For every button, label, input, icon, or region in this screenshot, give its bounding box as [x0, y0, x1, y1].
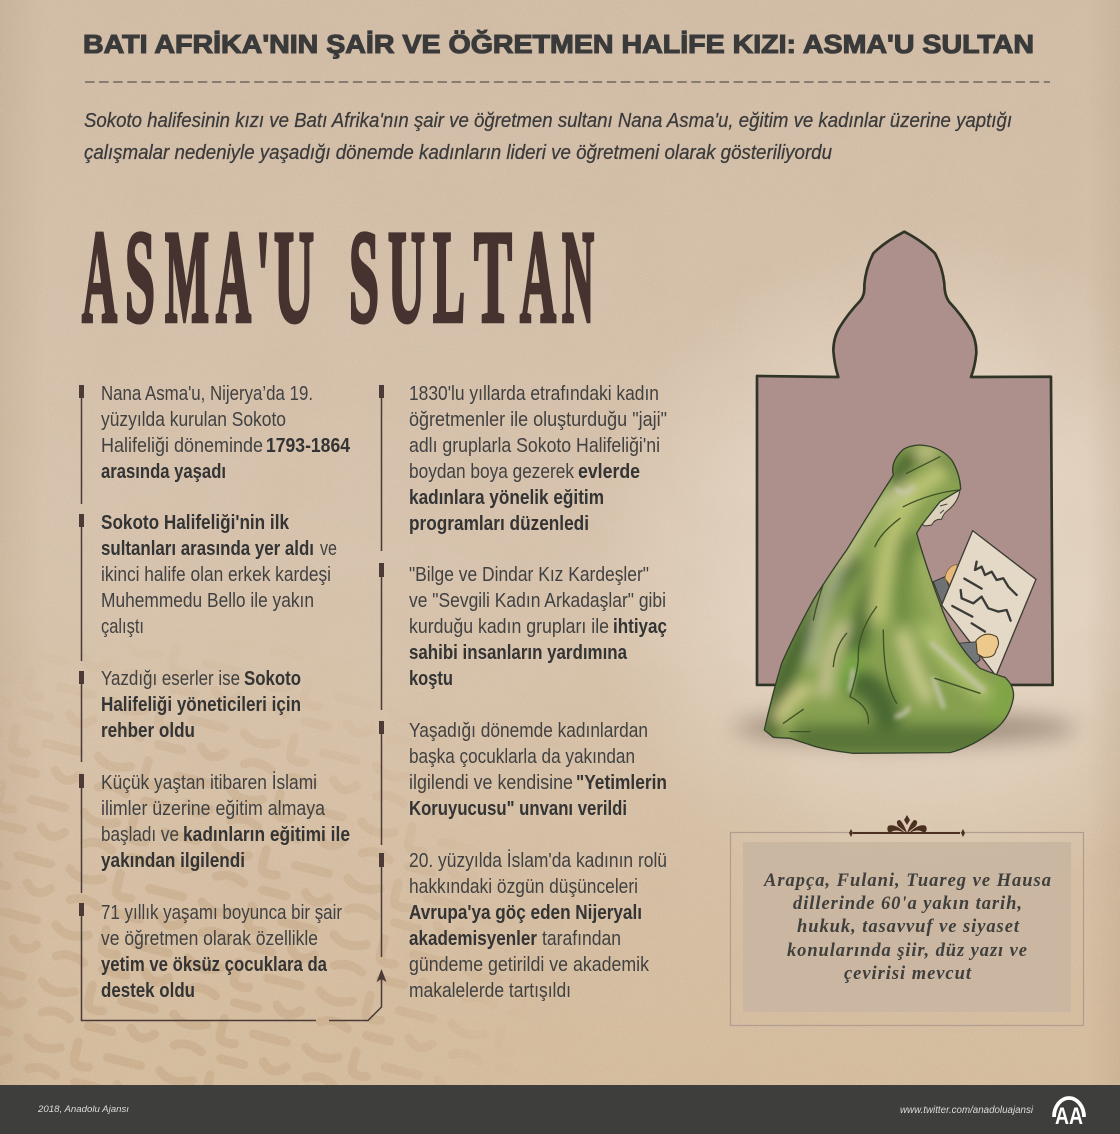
footer bar [0, 1085, 1120, 1134]
text block: women's groups: kurduğu kadın grupları ile [409, 615, 609, 638]
large heading: ASMA'U SULTAN: A [520, 203, 556, 350]
text block: years: Nana Asma'u, Nijerya’da 19. [101, 382, 313, 405]
text block: orphans [101, 901, 342, 1002]
title: BATI AFRİKA'NIN ŞAİR VE ÖĞRETMEN HALİFE KIZI: ASMA'U SULTAN [83, 29, 1034, 59]
quote panel [730, 815, 1084, 1026]
text block: jaji groups: öğretmenler ile oluşturduğu "jaji" [409, 408, 667, 431]
text block: jaji groups: 1830'lu yıllarda etrafındaki kadın [409, 382, 659, 405]
woman figure [757, 440, 1036, 760]
intro text [84, 109, 1012, 164]
text block: years [101, 382, 351, 483]
text block: protector of orphans: Koruyucusu" unvanı verildi [409, 797, 627, 820]
large heading: ASMA'U SULTAN [82, 203, 594, 350]
text block: women's groups: ve "Sevgili Kadın Arkadaşlar" gibi [409, 589, 666, 612]
lower hand and sleeve [958, 634, 998, 665]
large heading: ASMA'U SULTAN: U [274, 203, 314, 350]
text block: orphans: ve öğretmen olarak özellikle [101, 927, 318, 950]
text block: works: Sokoto [244, 667, 301, 690]
text block: women's groups: sahibi insanların yardımına [409, 641, 627, 664]
text block: education: başladı ve [101, 823, 179, 846]
face under hood [920, 490, 960, 526]
large heading: ASMA'U SULTAN: A [216, 203, 251, 350]
text block: jaji groups: adlı gruplarla Sokoto Halifeliği'ni [409, 434, 660, 457]
text block: works [101, 667, 301, 742]
text block: 20th century: 20. yüzyılda İslam'da kadının rolü [409, 849, 667, 872]
text block: education: ilimler üzerine eğitim almaya [101, 797, 326, 820]
text block: first sultans: Sokoto Halifeliği'nin ilk [101, 511, 289, 534]
text block: protector of orphans: başka çocuklarla da yakından [409, 745, 635, 768]
text: N [562, 203, 594, 350]
left text column [101, 382, 351, 1002]
text block: years: yüzyılda kurulan Sokoto [101, 408, 286, 431]
text block: women's groups [409, 563, 667, 690]
credit: 2018, Anadolu Ajansı [37, 1104, 129, 1115]
large heading: ASMA'U SULTAN: M [165, 203, 209, 350]
right text column [409, 382, 667, 1002]
text block: works: rehber oldu [101, 719, 195, 742]
text block: orphans: destek oldu [101, 979, 195, 1002]
text block: education: Küçük yaştan itibaren İslami [101, 771, 317, 794]
quote text: konularında şiir, düz yazı ve [787, 941, 1027, 961]
text block: 20th century: makalelerde tartışıldı [409, 979, 571, 1002]
text block: orphans: yetim ve öksüz çocuklara da [101, 953, 327, 976]
large heading: ASMA'U SULTAN: S [125, 203, 155, 350]
mihrab niche [757, 232, 1053, 685]
text block: first sultans [101, 511, 337, 638]
text block: protector of orphans: ilgilendi ve kendisine [409, 771, 573, 794]
intro text: Sokoto halifesinin kızı ve Batı Afrika'nın şair ve öğretmen sultanı Nana Asma'u, eğitim ve kadınlar üzerine yaptığı [84, 109, 1012, 132]
quote text: çevirisi mevcut [844, 964, 972, 984]
illustration: mihrab frame and seated woman [733, 232, 1077, 760]
quote text: Arapça, Fulani, Tuareg ve Hausa [763, 871, 1051, 891]
text block: jaji groups: programları düzenledi [409, 512, 589, 535]
dashed divider [85, 81, 1050, 83]
text block: 20th century: hakkındaki özgün düşünceleri [409, 875, 638, 898]
text block: education: yakından ilgilendi [101, 849, 245, 872]
text block: years: arasında yaşadı [101, 460, 226, 483]
text block: education: kadınların eğitimi ile [183, 823, 350, 846]
text block: years: 1793-1864 [266, 434, 351, 457]
text block: 20th century: tarafından [542, 927, 621, 950]
text block: first sultans: Muhemmedu Bello ile yakın [101, 589, 314, 612]
social link: www.twitter.com/anadoluajansi [900, 1105, 1034, 1116]
large heading: ASMA'U SULTAN: S [349, 203, 379, 350]
ornament [849, 815, 965, 837]
text block: first sultans: ikinci halife olan erkek kardeşi [101, 563, 331, 586]
text block: jaji groups: evlerde [578, 460, 640, 483]
text block: years: Halifeliği döneminde [101, 434, 263, 457]
text block: protector of orphans: Yaşadığı dönemde kadınlardan [409, 719, 648, 742]
text block: first sultans: sultanları arasında yer aldı [101, 537, 314, 560]
text block: first sultans: ve [320, 537, 337, 560]
text block: education [101, 771, 350, 872]
text block: protector of orphans: "Yetimlerin [576, 771, 667, 794]
text block: jaji groups: boydan boya gezerek [409, 460, 575, 483]
text block: works: Yazdığı eserler ise [101, 667, 240, 690]
text block: 20th century: gündeme getirildi ve akademik [409, 953, 650, 976]
text block: works: Halifeliği yöneticileri için [101, 693, 301, 716]
icon: Anadolu Agency logo: AA [1055, 1103, 1083, 1130]
timeline rail: left column [79, 385, 316, 1020]
text block: 20th century [409, 849, 667, 1002]
large heading: ASMA'U SULTAN: U [388, 203, 425, 350]
text block: jaji groups: kadınlara yönelik eğitim [409, 486, 604, 509]
upper hand and sleeve [933, 564, 960, 603]
large heading: ASMA'U SULTAN: A [82, 203, 117, 350]
quote text [763, 871, 1051, 984]
text block: women's groups: "Bilge ve Dindar Kız Kardeşler" [409, 563, 649, 586]
large heading: ASMA'U SULTAN: ' [256, 203, 270, 350]
text block: women's groups: koştu [409, 667, 453, 690]
intro text: çalışmalar nedeniyle yaşadığı dönemde kadınların lideri ve öğretmeni olarak gösteriliyordu [84, 141, 832, 164]
text block: protector of orphans [409, 719, 667, 820]
text block: orphans: 71 yıllık yaşamı boyunca bir şair [101, 901, 342, 924]
quote text: hukuk, tasavvuf ve siyaset [797, 917, 1020, 937]
timeline rail: right column with arrow [329, 385, 386, 1020]
large heading: ASMA'U SULTAN: T [474, 203, 512, 350]
text block: first sultans: çalıştı [101, 615, 144, 638]
text block: 20th century: akademisyenler [409, 927, 537, 950]
green cloak [757, 440, 1023, 760]
text block: 20th century: Avrupa'ya göç eden Nijeryalı [409, 901, 642, 924]
quote text: dillerinde 60'a yakın tarih, [793, 894, 1022, 914]
text block: jaji groups [409, 382, 667, 535]
large heading: ASMA'U SULTAN: L [433, 203, 465, 350]
floor shadow [733, 711, 1077, 745]
manuscript page [942, 531, 1036, 676]
text block: women's groups: ihtiyaç [613, 615, 667, 638]
